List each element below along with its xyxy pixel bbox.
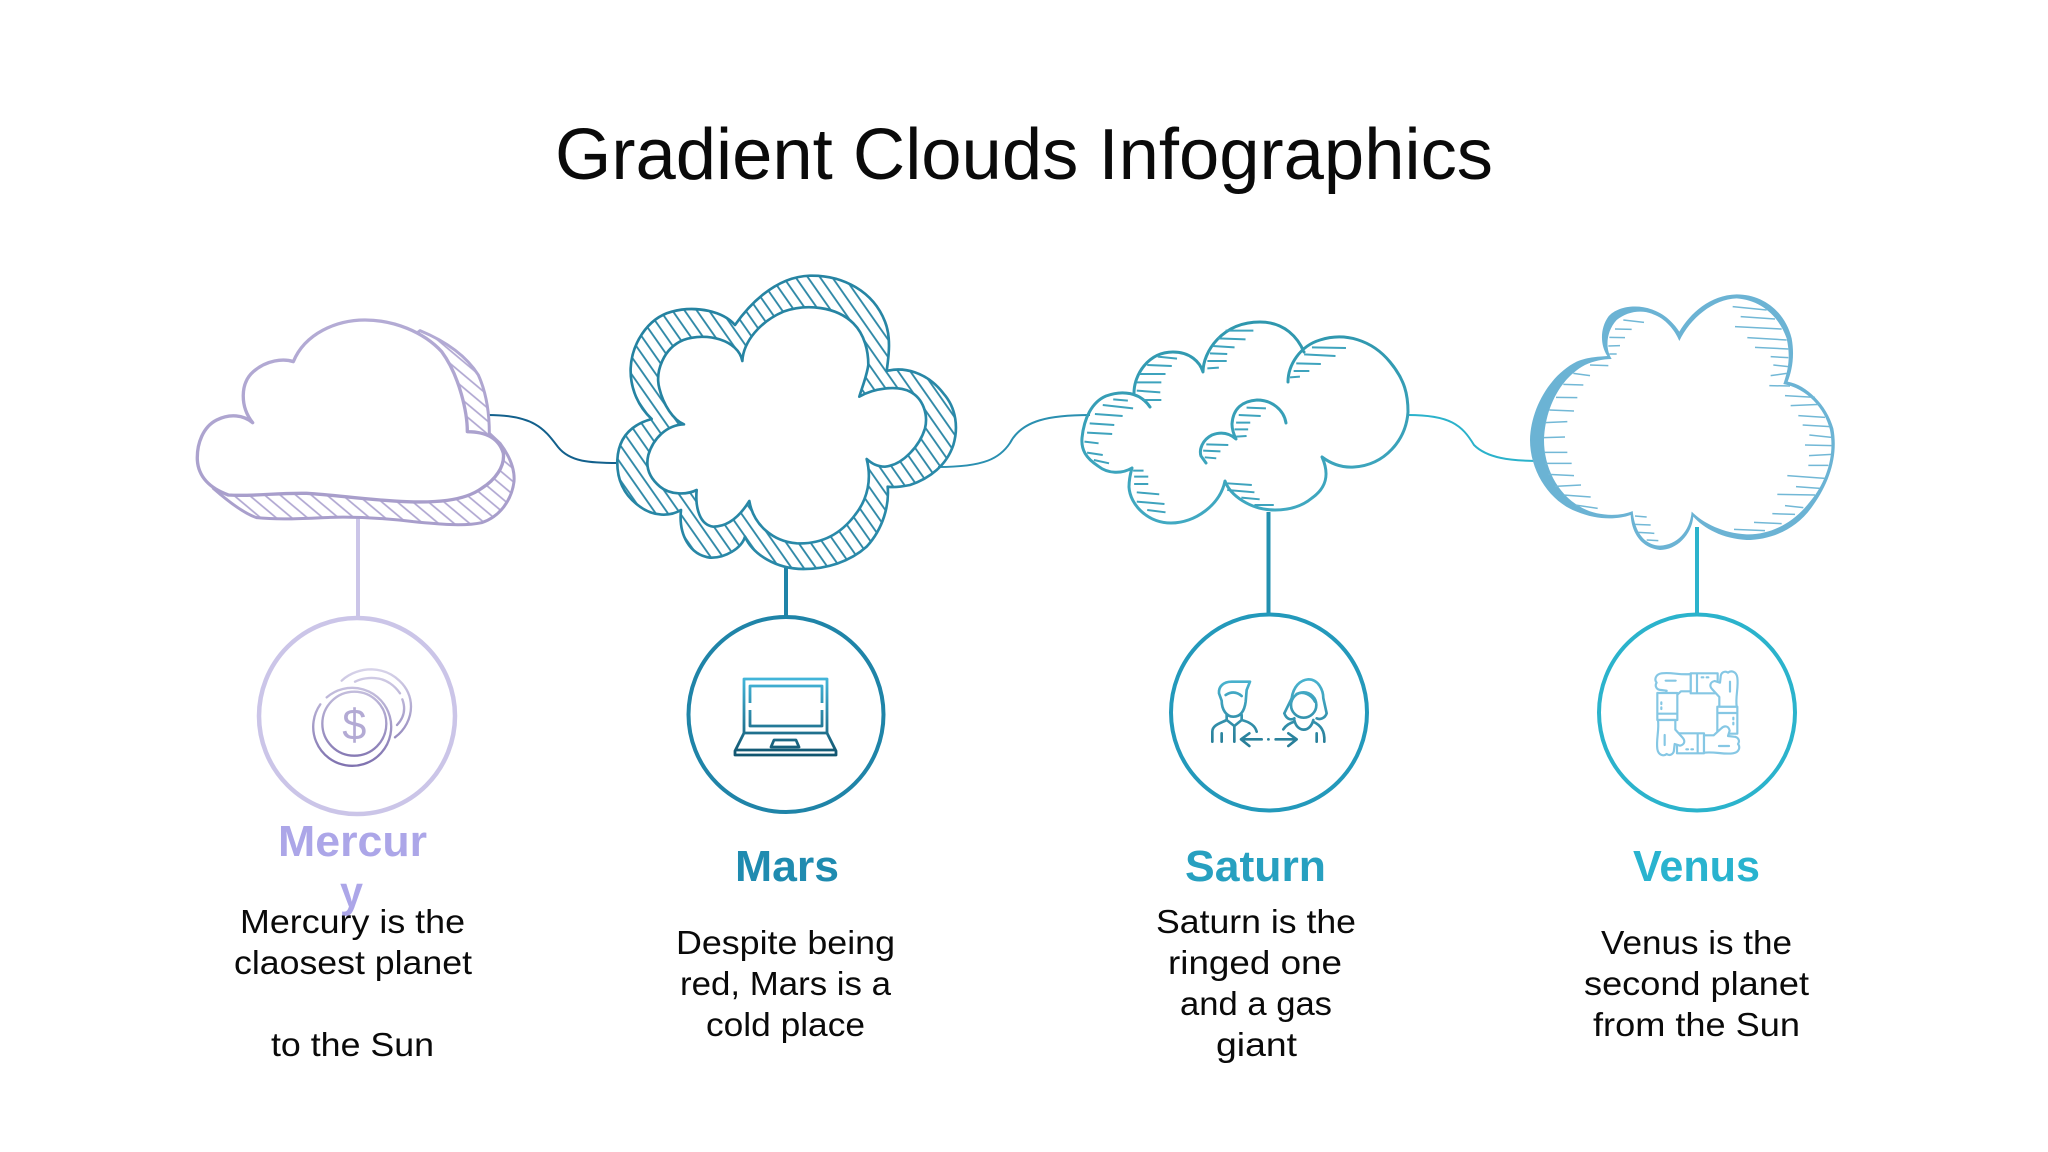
text: Venus description: second planet: [1584, 965, 1809, 1002]
text: Saturn description: and a gas: [1180, 985, 1332, 1022]
heading: Mercury: y: [340, 868, 363, 917]
text: Saturn description: ringed one: [1168, 944, 1342, 981]
stem: Saturn: [1266, 512, 1270, 614]
text: Saturn description: Saturn is the: [1156, 903, 1356, 940]
connector: Mercury to Mars: [488, 415, 618, 463]
stem: Mercury: [356, 517, 360, 618]
Mercury cloud: [197, 320, 514, 525]
text: Mercury description: [234, 903, 472, 1063]
text: Venus description: from the Sun: [1593, 1006, 1800, 1043]
heading: Venus: Venus: [1633, 842, 1760, 891]
circle: Mercury: [259, 618, 455, 814]
text: Mars description: Despite being: [676, 924, 895, 961]
Venus cloud: [1530, 294, 1835, 550]
heading: Saturn: Saturn: [1185, 842, 1326, 891]
stem: Venus: [1695, 527, 1699, 614]
circle: Saturn: [1171, 614, 1367, 810]
heading: Mars: Mars: [735, 842, 839, 891]
text: Venus description: [1584, 924, 1809, 1043]
circle: Mars: [688, 617, 884, 812]
text: Mars description: [676, 924, 895, 1043]
text: Mercury description: claosest planet: [234, 944, 472, 981]
text: Mercury description: Mercury is the: [240, 903, 465, 940]
text: Venus description: Venus is the: [1601, 924, 1792, 961]
connector: Saturn to Venus: [1408, 415, 1540, 461]
heading: Mercury: Mercur: [278, 817, 427, 866]
text: Saturn description: giant: [1216, 1026, 1297, 1063]
text: Mercury description: to the Sun: [271, 1026, 434, 1063]
Saturn cloud: [1082, 322, 1408, 523]
icon: coins: [313, 669, 411, 766]
text: Mars description: red, Mars is a: [680, 965, 892, 1002]
text: Saturn description: [1156, 903, 1356, 1063]
icon: four hands teamwork: [1655, 671, 1739, 755]
title: Gradient Clouds Infographics: [555, 115, 1493, 195]
stem: Mars: [784, 568, 788, 617]
icon: laptop: [735, 679, 836, 755]
circle: Venus: [1599, 614, 1795, 810]
heading: Mercury: [278, 817, 427, 917]
icon: two people with arrows: [1212, 679, 1327, 746]
connector: Mars to Saturn: [938, 415, 1090, 467]
Mars cloud: [617, 276, 956, 569]
text: Mars description: cold place: [706, 1006, 865, 1043]
icon: coins: $: [342, 701, 366, 749]
